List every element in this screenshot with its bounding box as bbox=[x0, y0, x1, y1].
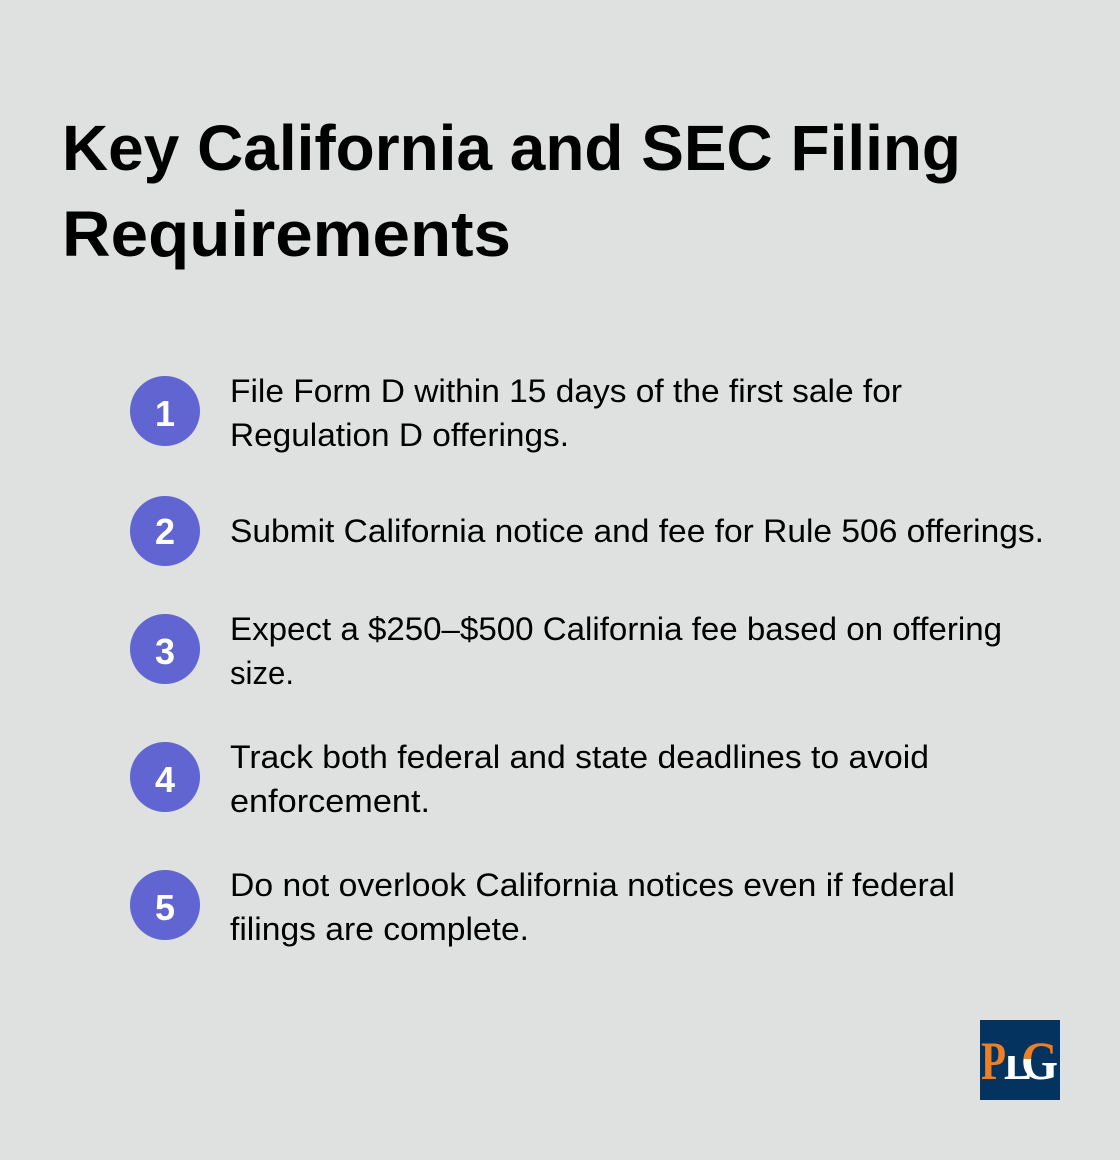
number badge 1: 1 bbox=[155, 393, 175, 434]
number badge 3 bbox=[130, 614, 200, 684]
list item 4 bbox=[130, 739, 929, 819]
item 5 text bbox=[230, 867, 955, 947]
item 4 text bbox=[230, 739, 929, 819]
number badge 2: 2 bbox=[155, 511, 175, 552]
logo: PLG: G bbox=[1021, 1031, 1058, 1091]
title: Requirements bbox=[62, 198, 511, 270]
number badge 5: 5 bbox=[155, 887, 175, 928]
logo: PLG: P bbox=[981, 1031, 1006, 1091]
item 5 text: filings are complete. bbox=[230, 911, 529, 947]
list item 5 bbox=[130, 867, 955, 947]
item 4 text: enforcement. bbox=[230, 783, 430, 819]
number badge 4: 4 bbox=[155, 759, 175, 800]
number badge 5 bbox=[130, 870, 200, 940]
item 3 text: size. bbox=[230, 655, 294, 691]
item 1 text: File Form D within 15 days of the first sale for bbox=[230, 373, 902, 409]
item 1 text: Regulation D offerings. bbox=[230, 417, 569, 453]
item 3 text: Expect a $250–$500 California fee based on offering bbox=[230, 611, 1002, 647]
item 3 text bbox=[230, 611, 1002, 691]
list item 3 bbox=[130, 611, 1002, 691]
number badge 2 bbox=[130, 496, 200, 566]
list item 1 bbox=[130, 373, 902, 453]
title: Key California and SEC Filing bbox=[62, 112, 961, 184]
logo: PLG bbox=[980, 1020, 1060, 1100]
list item 2 bbox=[130, 496, 1044, 566]
number badge 1 bbox=[130, 376, 200, 446]
number badge 3: 3 bbox=[155, 631, 175, 672]
item 5 text: Do not overlook California notices even if federal bbox=[230, 867, 955, 903]
number badge 4 bbox=[130, 742, 200, 812]
item 2 text: Submit California notice and fee for Rule 506 offerings. bbox=[230, 513, 1044, 549]
item 1 text bbox=[230, 373, 902, 453]
item 4 text: Track both federal and state deadlines to avoid bbox=[230, 739, 929, 775]
logo: PLG: L bbox=[1004, 1031, 1032, 1091]
title bbox=[62, 112, 961, 270]
